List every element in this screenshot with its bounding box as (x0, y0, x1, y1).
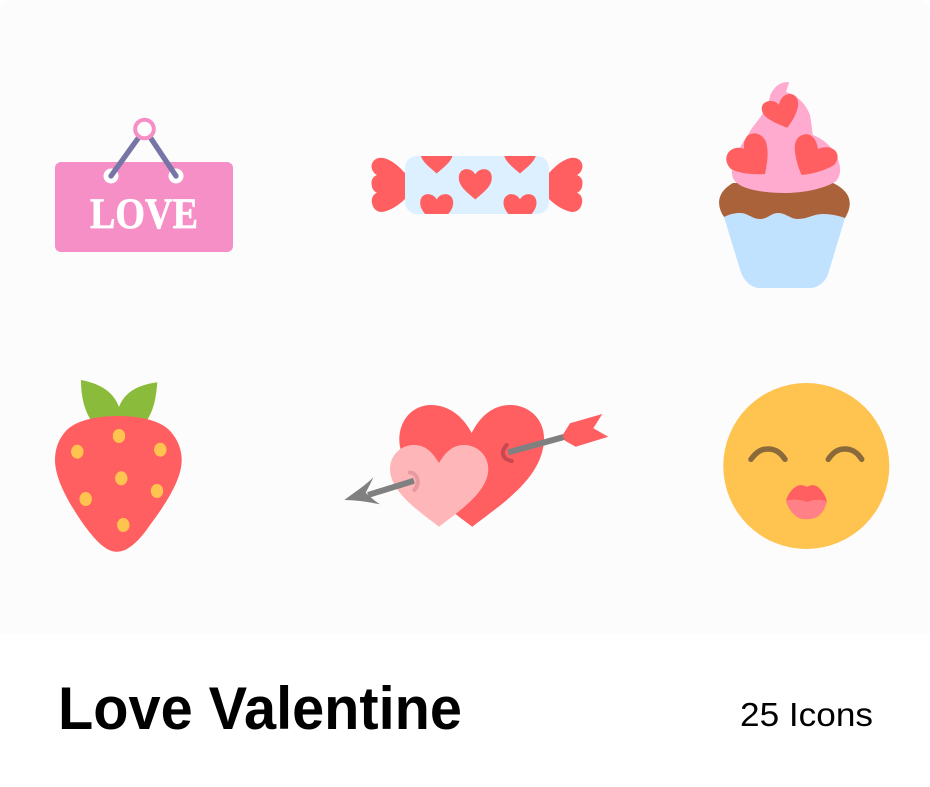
icon count label: 25 Icons (740, 696, 873, 733)
icon: love door sign (55, 120, 233, 252)
icon: kissing face emoji (723, 383, 889, 549)
icon: hearts pierced by arrow (344, 405, 608, 527)
icon: cupcake (719, 82, 850, 288)
title: Love Valentine (58, 675, 462, 742)
icon: strawberry (55, 380, 182, 552)
icon: love door sign: LOVE (90, 191, 198, 238)
icon: candy (372, 156, 582, 214)
